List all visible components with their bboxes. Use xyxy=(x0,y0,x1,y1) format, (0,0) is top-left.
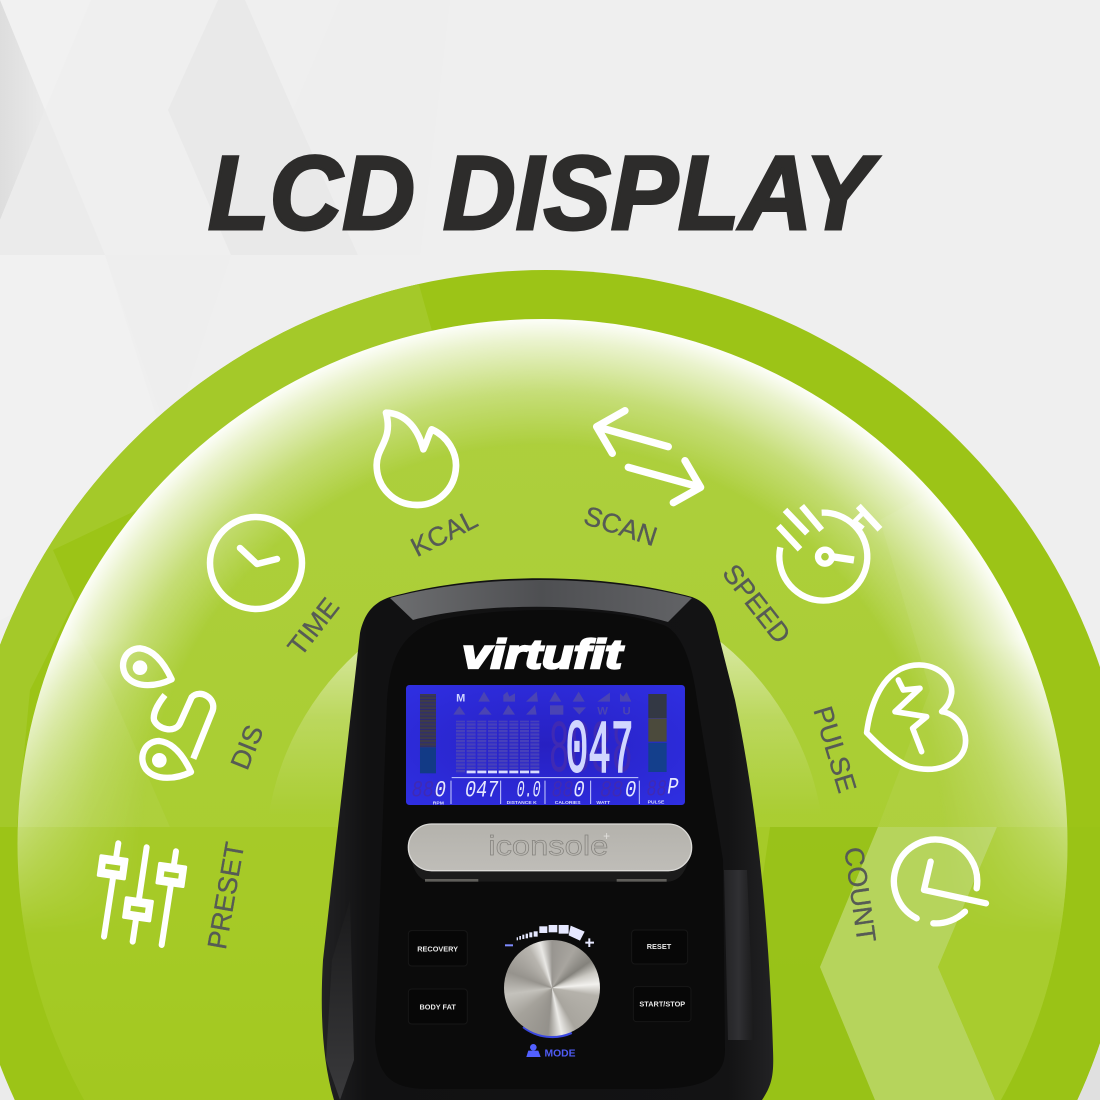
lower readouts: 0 xyxy=(625,778,636,804)
LCD screen: M xyxy=(456,692,465,704)
mode label xyxy=(526,1044,576,1059)
resistance arc xyxy=(505,925,594,947)
console xyxy=(322,578,773,1100)
LCD screen xyxy=(406,685,685,806)
lower readouts: 0 xyxy=(435,778,446,804)
bar matrix xyxy=(456,721,539,773)
icon: count timer xyxy=(894,840,986,923)
level meters xyxy=(420,694,667,773)
lower readouts: 0.0 xyxy=(517,778,541,804)
iconsole plate: + xyxy=(603,829,610,843)
lcd labels: PULSE xyxy=(648,799,665,805)
label: COUNT: COUNT xyxy=(838,845,881,944)
knob glow xyxy=(523,1027,572,1037)
lcd labels: CALORIES xyxy=(555,800,581,806)
LCD screen: 8888 xyxy=(549,710,633,795)
label: KCAL: KCAL xyxy=(406,504,482,563)
LCD screen: U xyxy=(623,706,631,718)
icon: flame xyxy=(377,413,456,505)
icon: distance route xyxy=(123,648,213,778)
mode label: MODE xyxy=(544,1048,576,1059)
button: body fat: BODY FAT xyxy=(419,1002,456,1011)
lower readouts: 88 xyxy=(600,778,623,804)
icon: clock xyxy=(210,517,302,609)
icon: sliders xyxy=(97,843,187,945)
button: recovery: RECOVERY xyxy=(417,944,458,953)
label: SCAN: SCAN xyxy=(580,500,661,552)
button: start/stop: START/STOP xyxy=(639,1000,685,1009)
lower readouts xyxy=(412,774,679,804)
lower readouts: 88 xyxy=(647,776,667,802)
label: SPEED: SPEED xyxy=(716,559,796,649)
console top cap xyxy=(390,580,692,622)
lcd labels: WATT xyxy=(596,800,610,806)
side highlights xyxy=(724,870,754,1040)
lcd labels: RPM xyxy=(433,800,444,806)
icon: scan arrows xyxy=(597,411,701,503)
label: PRESET: PRESET xyxy=(202,840,250,951)
iconsole plate xyxy=(408,824,692,882)
button: reset xyxy=(632,930,688,964)
logo: virtufit xyxy=(462,631,625,677)
program icons xyxy=(453,692,631,715)
controls xyxy=(408,824,692,1059)
button: start/stop xyxy=(633,987,691,1022)
chevron xyxy=(820,827,997,1100)
button: body fat xyxy=(408,989,467,1024)
console body xyxy=(322,578,773,1100)
label: PULSE: PULSE xyxy=(808,703,862,796)
icon: broken heart xyxy=(867,665,966,769)
lower readouts: 88 xyxy=(552,778,573,804)
main readout 047 xyxy=(549,710,634,795)
icon: stopwatch xyxy=(778,506,880,601)
lcd labels: DISTANCE K xyxy=(507,800,537,806)
inner green circle xyxy=(0,319,1100,1100)
lower readouts: 888 xyxy=(412,778,445,804)
lcd labels xyxy=(433,799,665,806)
button: reset: RESET xyxy=(647,942,672,951)
label: DIS: DIS xyxy=(225,721,270,774)
dome glow behind console xyxy=(265,580,825,1100)
console face xyxy=(375,610,725,1089)
iconsole plate: iconsole xyxy=(488,830,608,861)
button: recovery xyxy=(408,931,467,966)
lower readouts: 0 xyxy=(573,778,585,804)
title: LCD DISPLAY xyxy=(208,135,880,252)
knob xyxy=(504,940,600,1036)
lower readouts: 047 xyxy=(465,778,499,804)
lower readouts: P xyxy=(667,774,679,800)
main readout 047: 047 xyxy=(566,710,634,795)
outer green circle xyxy=(0,260,1100,1100)
LCD screen: W xyxy=(597,706,608,718)
label: TIME: TIME xyxy=(282,592,345,661)
